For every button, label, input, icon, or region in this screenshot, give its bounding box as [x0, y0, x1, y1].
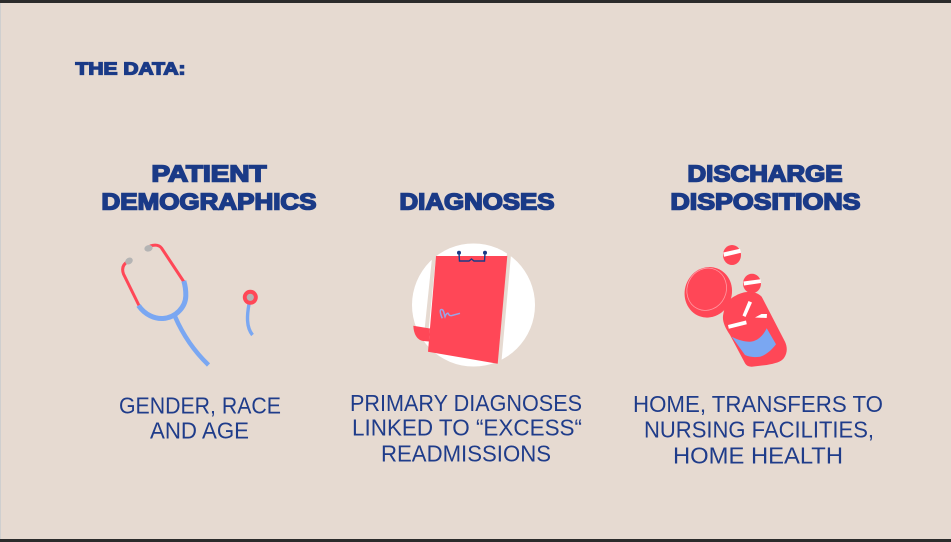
body text: gender, race and age [119, 392, 281, 444]
bottle markings [728, 301, 767, 329]
heading: patient demographics: DEMOGRAPHICS [102, 188, 316, 214]
title: THE DATA: [76, 58, 186, 78]
body text: primary diagnoses: PRIMARY DIAGNOSES [350, 390, 582, 416]
icon: pill bottle [677, 245, 787, 367]
icon: stethoscope [123, 244, 258, 365]
body text: discharge destinations [633, 391, 883, 469]
heading: patient demographics [102, 160, 316, 214]
heading: discharge dispositions: DISCHARGE [688, 160, 842, 186]
body text: discharge destinations: HOME HEALTH [673, 443, 843, 469]
bottle body [723, 292, 787, 367]
body text: gender, race and age: GENDER, RACE [119, 392, 281, 418]
pills [723, 245, 741, 265]
heading: discharge dispositions: DISPOSITIONS [670, 188, 860, 214]
heading: diagnoses: DIAGNOSES [400, 188, 554, 214]
heading: discharge dispositions [670, 160, 860, 214]
body text: discharge destinations: NURSING FACILITIES, [644, 416, 874, 442]
body text: primary diagnoses [350, 390, 582, 467]
panel: diagnoses [350, 188, 582, 467]
body text: discharge destinations: HOME, TRANSFERS TO [633, 391, 883, 417]
body text: gender, race and age: AND AGE [150, 418, 249, 444]
bottle cap [677, 260, 739, 324]
bottle label [732, 328, 776, 357]
body text: primary diagnoses: LINKED TO “EXCESS“ [352, 415, 582, 441]
panel: patient demographics [102, 160, 316, 444]
heading: patient demographics: PATIENT [152, 160, 267, 186]
icon: clipboard [412, 244, 535, 366]
panel: discharge dispositions [633, 160, 883, 469]
body text: primary diagnoses: READMISSIONS [381, 441, 551, 467]
